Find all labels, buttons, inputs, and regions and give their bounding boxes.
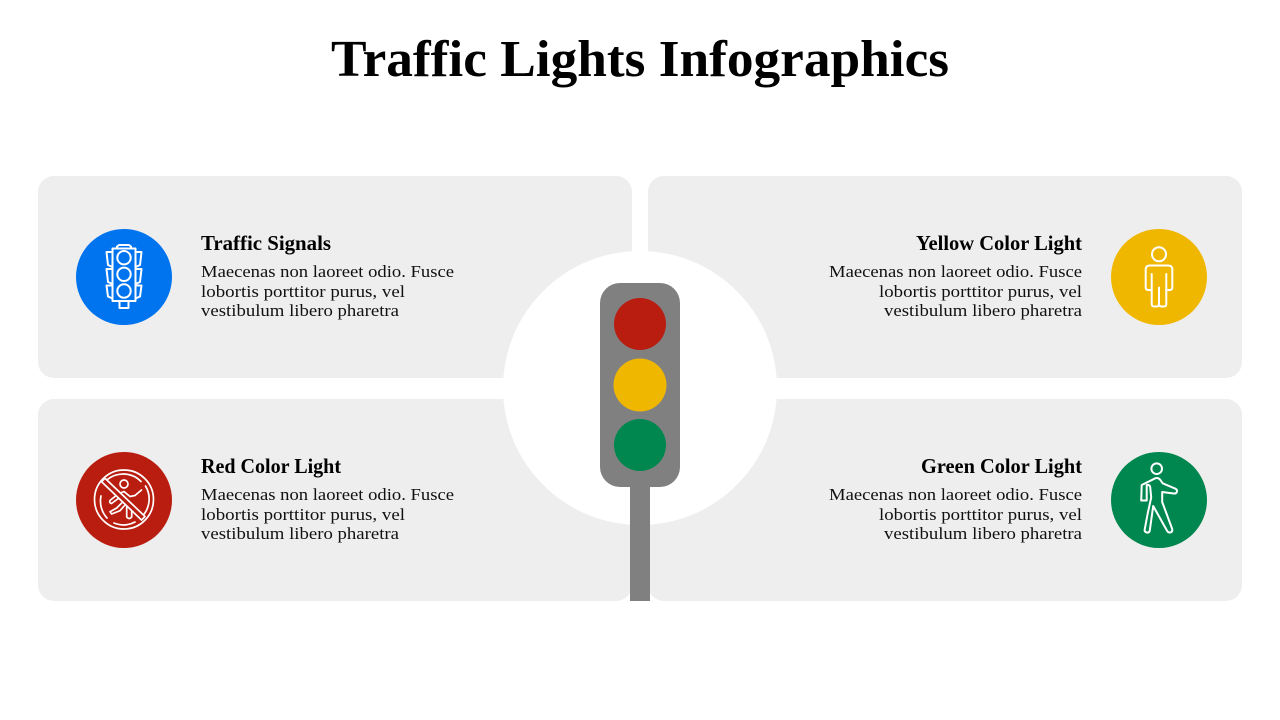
title: Traffic Lights Infographics bbox=[331, 31, 949, 88]
icon: standing person bbox=[1111, 229, 1207, 325]
icon: no pedestrian running bbox=[76, 452, 172, 548]
text block: lobortis porttitor purus, vel bbox=[879, 282, 1082, 301]
text block: Maecenas non laoreet odio. Fusce bbox=[201, 262, 454, 281]
text block: lobortis porttitor purus, vel bbox=[879, 505, 1082, 524]
text block: Maecenas non laoreet odio. Fusce bbox=[829, 485, 1082, 504]
panel: traffic signals bbox=[38, 176, 632, 378]
central traffic light bbox=[503, 251, 777, 601]
panel: yellow color light bbox=[648, 176, 1242, 378]
text block bbox=[201, 485, 454, 543]
yellow light bbox=[614, 358, 666, 412]
heading: Traffic Signals bbox=[201, 231, 331, 255]
icon: walking person bbox=[1111, 452, 1207, 548]
text block: vestibulum libero pharetra bbox=[884, 301, 1082, 320]
pole bbox=[630, 480, 650, 601]
text block bbox=[201, 262, 454, 320]
text block: vestibulum libero pharetra bbox=[884, 524, 1082, 543]
panel: green color light bbox=[648, 399, 1242, 601]
icon: traffic signal bbox=[76, 229, 172, 325]
text block: Maecenas non laoreet odio. Fusce bbox=[829, 262, 1082, 281]
text block bbox=[829, 485, 1082, 543]
red light bbox=[614, 298, 666, 350]
text block bbox=[829, 262, 1082, 320]
heading: Green Color Light bbox=[921, 454, 1082, 478]
white circle backdrop bbox=[503, 251, 777, 525]
green light bbox=[614, 419, 666, 471]
text block: vestibulum libero pharetra bbox=[201, 301, 399, 320]
text block: Maecenas non laoreet odio. Fusce bbox=[201, 485, 454, 504]
heading: Yellow Color Light bbox=[916, 231, 1082, 255]
heading: Red Color Light bbox=[201, 454, 341, 478]
panel: red color light bbox=[38, 399, 632, 601]
text block: lobortis porttitor purus, vel bbox=[201, 505, 405, 524]
text block: vestibulum libero pharetra bbox=[201, 524, 399, 543]
housing bbox=[600, 283, 680, 487]
text block: lobortis porttitor purus, vel bbox=[201, 282, 405, 301]
